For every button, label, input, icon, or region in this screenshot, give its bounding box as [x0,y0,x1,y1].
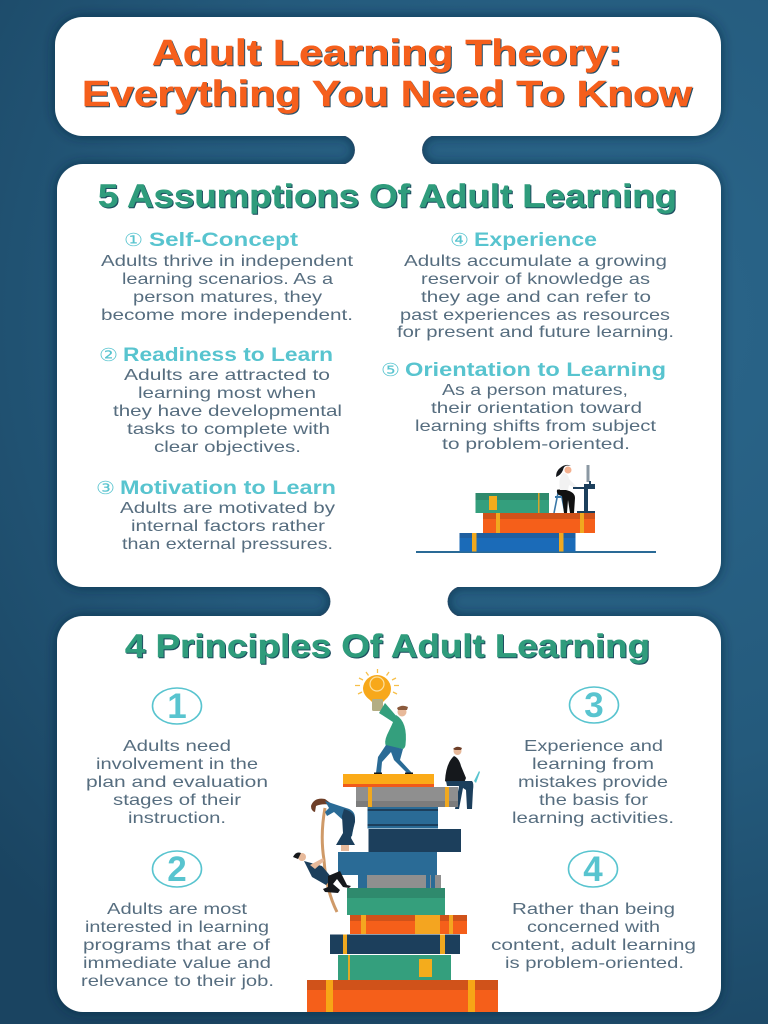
orange book [483,513,595,533]
assumption 1: self-concept: ① [124,230,143,251]
principle 2: interested in learning [85,919,269,936]
assumption 5: orientation to learning: ⑤ [381,360,400,381]
panel: assumptions [57,164,721,587]
principle 1: plan and evaluation [86,774,268,791]
grey and blue book [358,875,441,888]
assumption 1: self-concept: become more independent. [101,307,353,324]
base orange book [307,980,498,1012]
woman pulling rope [311,799,355,851]
principle 2: immediate value and [83,955,271,972]
principle 3: 3 [584,686,604,725]
principle 2 [81,850,274,990]
principle 4: is problem-oriented. [505,955,684,972]
assumption 4: experience: ④ [450,230,469,251]
illustration: woman at desk on books [416,465,656,553]
principle 3: learning from [532,756,654,773]
icon: light bulb [355,669,399,711]
assumption 4: experience [397,229,674,341]
navy book bands [330,934,460,954]
principle 3 [512,686,674,827]
man lifting bulb [374,703,413,774]
assumption 5: orientation to learning: learning shifts from subject [415,418,657,435]
assumption 3: motivation to learn: Motivation to Learn [120,477,336,499]
connector: assumptions to principles [315,586,463,617]
principle 4: 4 [583,850,603,889]
assumption 2: readiness to learn: ② [99,345,118,366]
panel: title [55,17,721,136]
principle 4: content, adult learning [491,937,696,954]
assumption 4: experience: Experience [474,229,597,251]
principle 4 [491,850,696,972]
assumption 5: orientation to learning: their orientation toward [431,400,642,417]
illustration: book stack with people [293,669,498,1012]
principle 1: Adults need [123,738,231,755]
heading: 4 principles: 4 Principles Of Adult Learning [125,628,650,664]
yellow book [343,774,434,787]
title: Adult Learning Theory: [152,32,622,73]
green book [476,493,549,513]
assumption 2: readiness to learn [99,344,342,456]
assumption 1: self-concept: Adults thrive in independent [101,253,354,270]
woman at desk [554,465,595,513]
heading: 5 assumptions: 5 Assumptions Of Adult Learning [98,178,677,214]
green book [347,888,445,915]
principle 3: learning activities. [512,810,674,827]
principle 4: Rather than being [512,901,675,918]
assumption 2: readiness to learn: learning most when [138,385,316,402]
principle 4: concerned with [527,919,660,936]
assumption 1: self-concept [101,229,354,324]
assumption 1: self-concept: learning scenarios. As a [122,271,333,288]
panel: principles [57,616,721,1012]
principle 1: instruction. [128,810,226,827]
principle 2: programs that are of [83,937,271,954]
assumption 5: orientation to learning: Orientation to Learning [405,359,666,381]
assumption 5: orientation to learning [381,359,666,453]
connector: title to assumptions [340,135,437,165]
assumption 4: experience: for present and future learning. [397,324,674,341]
title [82,32,693,114]
principle 3: Experience and [524,738,663,755]
assumption 2: readiness to learn: Readiness to Learn [123,344,333,366]
assumption 4: experience: they age and can refer to [421,289,651,306]
assumption 3: motivation to learn: internal factors rather [131,518,326,535]
grey book [356,787,458,807]
assumption 1: self-concept: Self-Concept [149,229,299,251]
assumption 3: motivation to learn: than external pressures. [122,536,333,553]
principle 3: the basis for [539,792,649,809]
seated man with laptop [445,747,480,809]
assumption 2: readiness to learn: they have developmental [113,403,342,420]
assumption 3: motivation to learn: ③ [96,478,115,499]
principle 2: Adults are most [107,901,248,918]
assumption 3: motivation to learn: Adults are motivated by [120,500,335,517]
orange book [350,915,467,934]
assumption 4: experience: past experiences as resources [400,307,670,324]
principle 2: 2 [167,850,187,889]
assumption 4: experience: reservoir of knowledge as [421,271,650,288]
assumption 1: self-concept: person matures, they [133,289,322,306]
principle 1: 1 [167,687,187,726]
assumption 4: experience: Adults accumulate a growing [404,253,667,270]
principle 1 [86,687,268,827]
assumption 3: motivation to learn [96,477,336,553]
blue book [368,807,438,828]
assumption 2: readiness to learn: clear objectives. [154,439,301,456]
assumption 2: readiness to learn: tasks to complete with [127,421,330,438]
navy book [368,829,461,852]
assumption 2: readiness to learn: Adults are attracted to [124,367,330,384]
title: Everything You Need To Know [82,73,693,114]
principle 1: involvement in the [96,756,258,773]
blue book wide [338,852,437,875]
green book with tag [338,955,451,980]
assumption 5: orientation to learning: As a person matures, [442,382,628,399]
assumption 5: orientation to learning: to problem-oriented. [442,436,630,453]
principle 2: relevance to their job. [81,973,274,990]
principle 3: mistakes provide [518,774,668,791]
rope [322,808,337,912]
principle 1: stages of their [113,792,242,809]
blue book [460,533,576,552]
climbing man [293,852,351,893]
